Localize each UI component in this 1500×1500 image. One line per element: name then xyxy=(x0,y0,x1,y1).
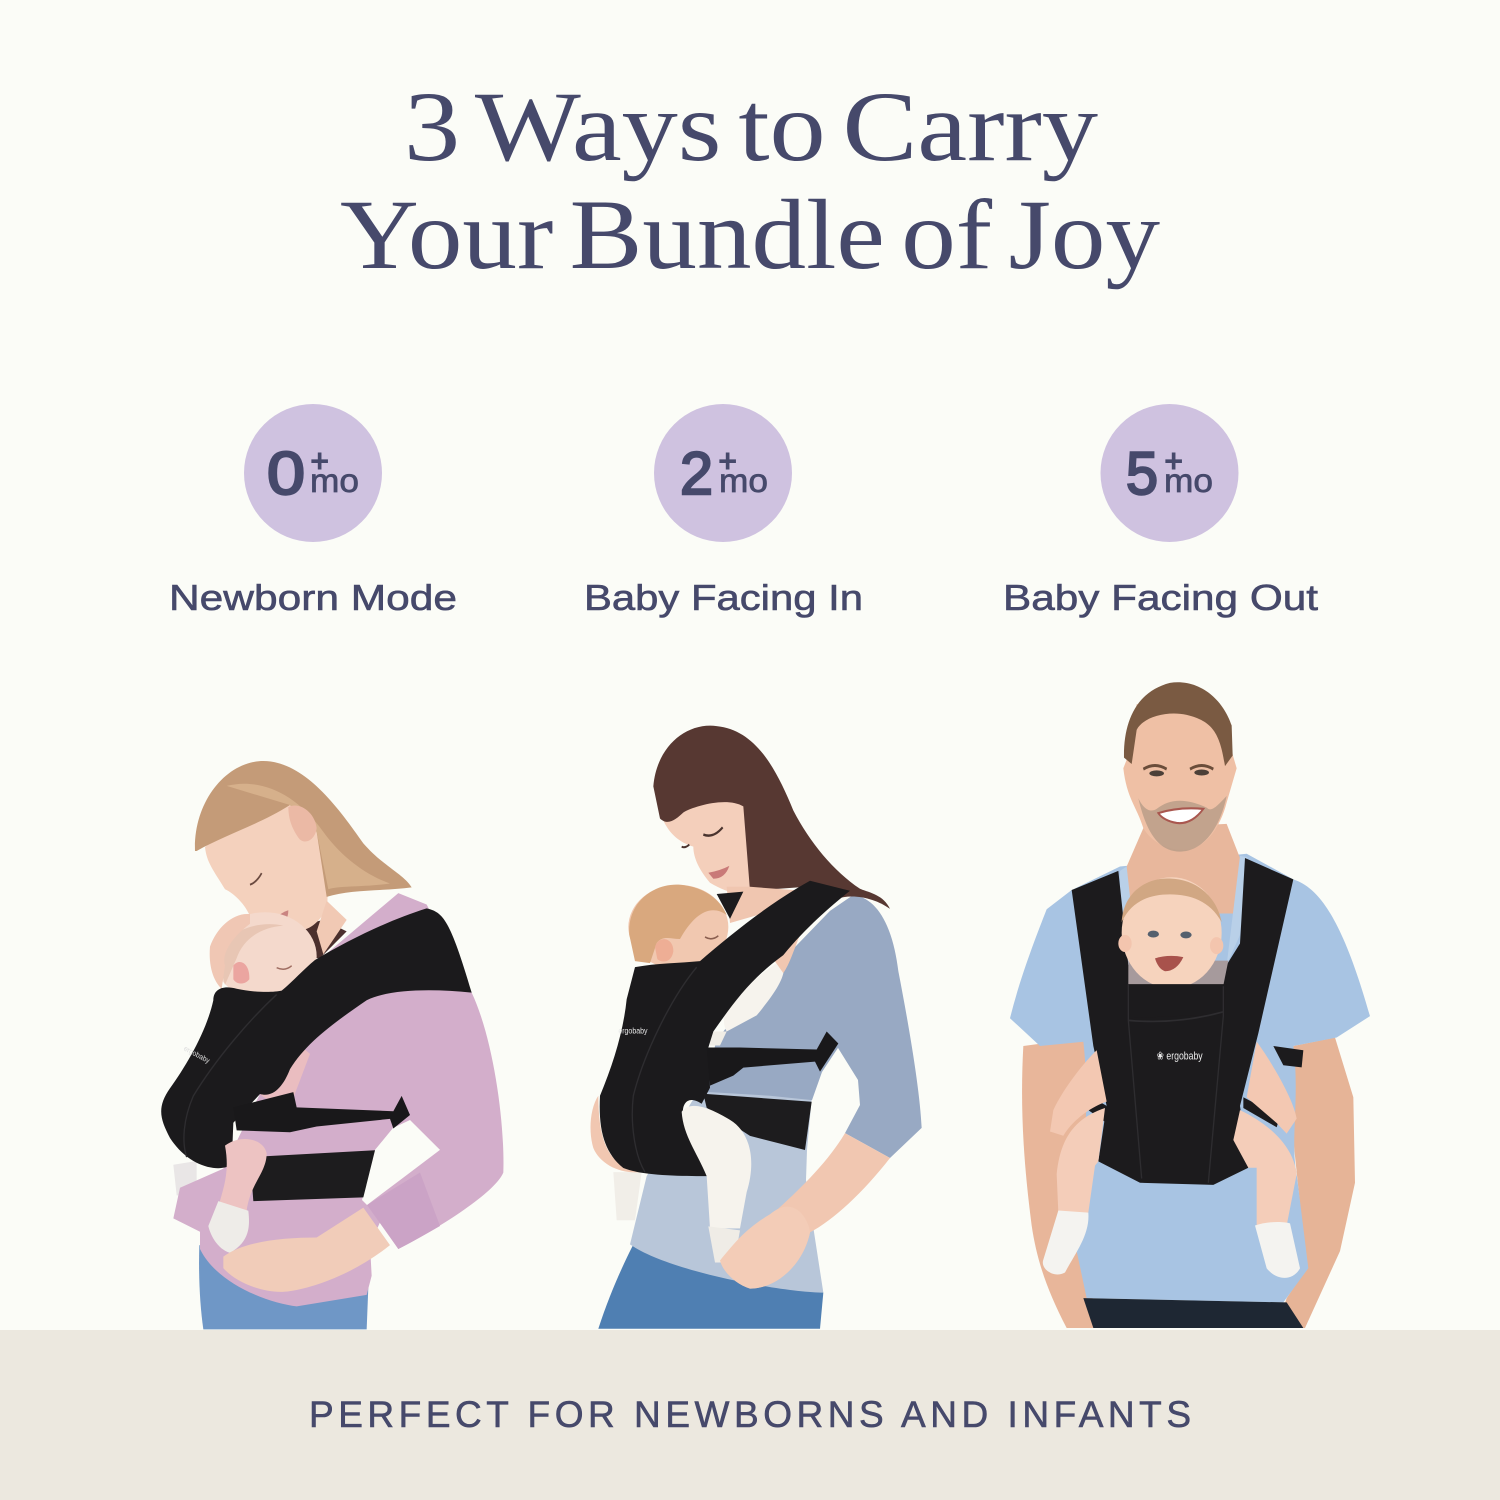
icon: 0+ months badge xyxy=(244,404,382,542)
icon: 2+ months badge: mo xyxy=(719,462,768,499)
footer band xyxy=(0,1330,1500,1500)
illustration: man carrying baby facing out: ❀ ergobaby xyxy=(1157,1051,1203,1063)
illustration: woman carrying newborn: ergobaby xyxy=(183,1044,211,1066)
icon: 5+ months badge xyxy=(1100,404,1238,542)
illustration: woman carrying baby facing in: ergobaby xyxy=(618,1026,648,1036)
icon: 2+ months badge: 2 xyxy=(680,440,713,507)
icon: 2+ months badge xyxy=(654,404,792,542)
icon: 2+ months badge: + xyxy=(718,442,737,479)
title xyxy=(340,71,1160,290)
icon: 5+ months badge: mo xyxy=(1164,462,1213,499)
illustration: woman carrying baby facing in xyxy=(591,726,922,1329)
title: 3 Ways to Carry xyxy=(404,71,1098,182)
panel: newborn mode age badge and label xyxy=(169,404,457,618)
icon: 5+ months badge: 5 xyxy=(1126,440,1158,507)
icon: 5+ months badge: + xyxy=(1164,442,1183,479)
icon: 0+ months badge: mo xyxy=(310,462,359,499)
icon: 0+ months badge: + xyxy=(310,442,329,479)
panel: baby facing in age badge and label xyxy=(584,404,863,618)
label: newborn mode: Newborn Mode xyxy=(169,577,457,618)
footer text: PERFECT FOR NEWBORNS AND INFANTS xyxy=(309,1394,1191,1435)
icon: 0+ months badge: 0 xyxy=(267,440,305,507)
label: baby facing in: Baby Facing In xyxy=(584,577,863,618)
illustration: woman carrying newborn xyxy=(161,761,503,1329)
illustration: man carrying baby facing out xyxy=(1010,682,1370,1328)
panel: baby facing out age badge and label xyxy=(1003,404,1318,618)
title: Your Bundle of Joy xyxy=(340,179,1160,290)
label: baby facing out: Baby Facing Out xyxy=(1003,577,1318,618)
